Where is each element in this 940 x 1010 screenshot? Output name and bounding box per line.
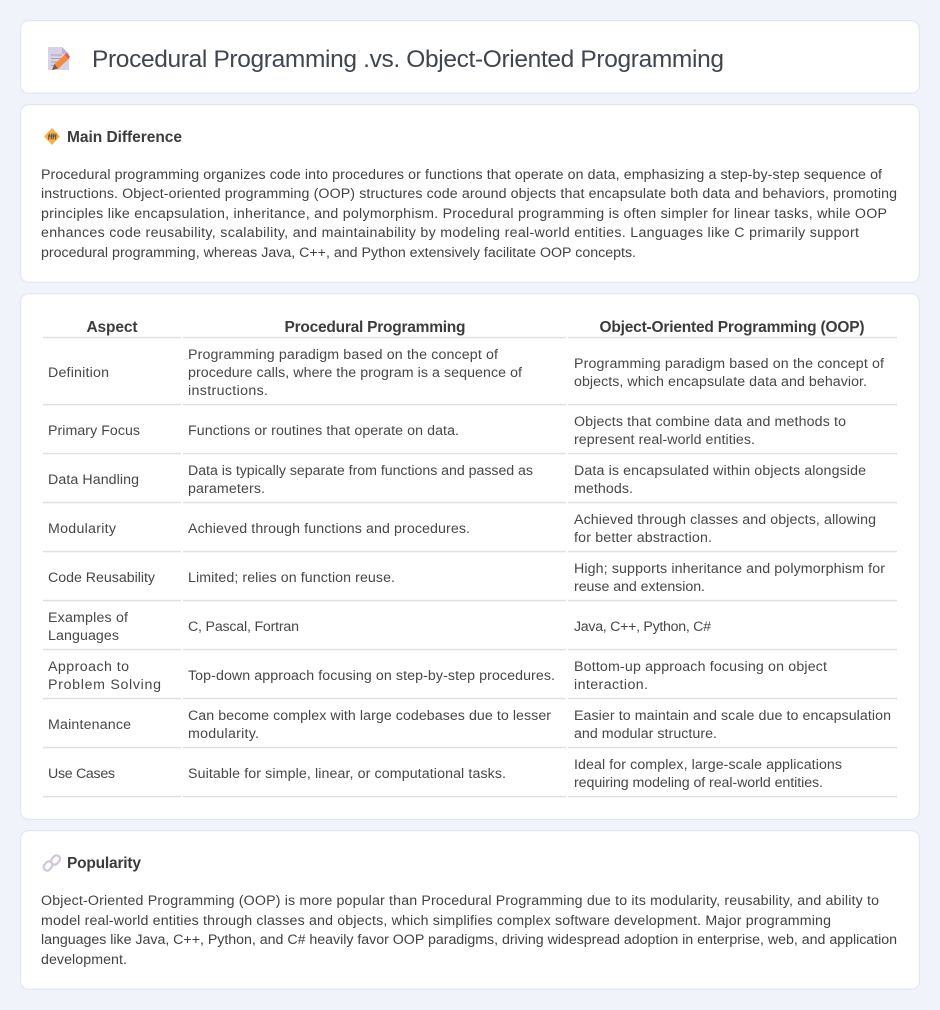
row: maintenance: modularity. — [188, 726, 259, 742]
row: use cases — [48, 757, 842, 791]
row: primary focus: represent real-world entities. — [574, 432, 755, 448]
row: approach to problem solving: Problem Solving — [48, 677, 161, 693]
row: definition: objects, which encapsulate data and behavior. — [574, 374, 867, 390]
row: examples of languages: Java, C++, Python, C# — [574, 619, 711, 635]
row: definition — [48, 347, 884, 399]
panel: popularity — [21, 831, 919, 989]
text block: popularity paragraph: languages like Java, C++, Python, and C# heavily favor OOP paradigms, driving widespread adoption in enterprise, web, and application — [41, 932, 897, 948]
panel: comparison table — [21, 294, 919, 819]
row: maintenance: Maintenance — [48, 717, 131, 733]
row: definition: Definition — [48, 365, 109, 381]
table header — [86, 319, 864, 336]
row: data handling: Data is typically separate from functions and passed as — [188, 463, 533, 479]
row: examples of languages: Examples of — [48, 610, 128, 626]
row: primary focus — [48, 414, 846, 448]
icon: chain link — [42, 854, 61, 872]
row: modularity — [48, 512, 876, 546]
row: examples of languages: Languages — [48, 628, 119, 644]
row: modularity: Achieved through functions and procedures. — [188, 521, 470, 537]
row: use cases: requiring modeling of real-world entities. — [574, 775, 823, 791]
row: data handling — [48, 463, 866, 497]
row: primary focus: Primary Focus — [48, 423, 140, 439]
row: use cases: Ideal for complex, large-scale applications — [574, 757, 842, 773]
text block: main difference paragraph: instructions. Object-oriented programming (OOP) structures code around objects that encapsulate both data and behaviors, promoting — [41, 186, 897, 202]
row: approach to problem solving: Bottom-up approach focusing on object — [574, 659, 827, 675]
icon: warning diamond — [44, 128, 60, 145]
text block: popularity paragraph: model real-world entities through classes and objects, which simplifies complex software development. Major programming — [41, 913, 831, 929]
title: Procedural Programming .vs. Object-Oriented Programming — [92, 46, 724, 73]
row: modularity: for better abstraction. — [574, 530, 712, 546]
row: code reusability: Code Reusability — [48, 570, 156, 586]
text block: main difference paragraph — [41, 167, 897, 261]
row: maintenance: Easier to maintain and scale due to encapsulation — [574, 708, 891, 724]
panel: title header — [21, 21, 919, 93]
text block: main difference paragraph: Procedural programming organizes code into procedures or functions that operate on data, emphasizing a step-by-step sequence of — [41, 167, 882, 183]
icon: document with pencil — [48, 47, 70, 70]
row: examples of languages: C, Pascal, Fortran — [188, 619, 299, 635]
row: data handling: Data Handling — [48, 472, 139, 488]
text block: popularity paragraph — [41, 893, 897, 968]
row: code reusability — [48, 561, 885, 595]
row: use cases: Suitable for simple, linear, or computational tasks. — [188, 766, 506, 782]
row: primary focus: Functions or routines that operate on data. — [188, 423, 459, 439]
row: maintenance: and modular structure. — [574, 726, 717, 742]
row: approach to problem solving: interaction. — [574, 677, 648, 693]
row: approach to problem solving: Top-down approach focusing on step-by-step procedures. — [188, 668, 555, 684]
row: approach to problem solving: Approach to — [48, 659, 129, 675]
text block: main difference paragraph: principles like encapsulation, inheritance, and polymorphism. Procedural programming is often simpler for linear tasks, while OOP — [41, 206, 887, 222]
row: definition: instructions. — [188, 383, 268, 399]
row: data handling: Data is encapsulated within objects alongside — [574, 463, 866, 479]
text block: popularity paragraph: Object-Oriented Programming (OOP) is more popular than Procedural Programming due to its modularity, reusability, and ability to — [41, 893, 879, 909]
row: use cases: Use Cases — [48, 766, 115, 782]
row: maintenance — [48, 708, 891, 742]
row: code reusability: Limited; relies on function reuse. — [188, 570, 395, 586]
row: maintenance: Can become complex with large codebases due to lesser — [188, 708, 551, 724]
row: definition: procedure calls, where the program is a sequence of — [188, 365, 522, 381]
row: data handling: methods. — [574, 481, 633, 497]
panel: main difference — [21, 105, 919, 282]
row: definition: Programming paradigm based on the concept of — [574, 356, 884, 372]
row: primary focus: Objects that combine data and methods to — [574, 414, 846, 430]
row: examples of languages — [48, 610, 711, 644]
table header: Aspect — [86, 319, 138, 336]
row: modularity: Achieved through classes and objects, allowing — [574, 512, 876, 528]
heading: popularity: Popularity — [67, 855, 141, 872]
row: approach to problem solving — [48, 659, 827, 693]
row: code reusability: High; supports inheritance and polymorphism for — [574, 561, 885, 577]
table header: Procedural Programming — [284, 319, 466, 336]
row: code reusability: reuse and extension. — [574, 579, 705, 595]
row: modularity: Modularity — [48, 521, 117, 537]
text block: main difference paragraph: enhances code reusability, scalability, and maintainability by modeling real-world entities. Languages like C primarily support — [41, 225, 859, 241]
heading: main difference: Main Difference — [67, 129, 182, 146]
row: data handling: parameters. — [188, 481, 265, 497]
text block: popularity paragraph: development. — [41, 952, 127, 968]
row: definition: Programming paradigm based on the concept of — [188, 347, 498, 363]
text block: main difference paragraph: procedural programming, whereas Java, C++, and Python extensively facilitate OOP concepts. — [41, 245, 636, 261]
table header: Object-Oriented Programming (OOP) — [600, 319, 864, 336]
